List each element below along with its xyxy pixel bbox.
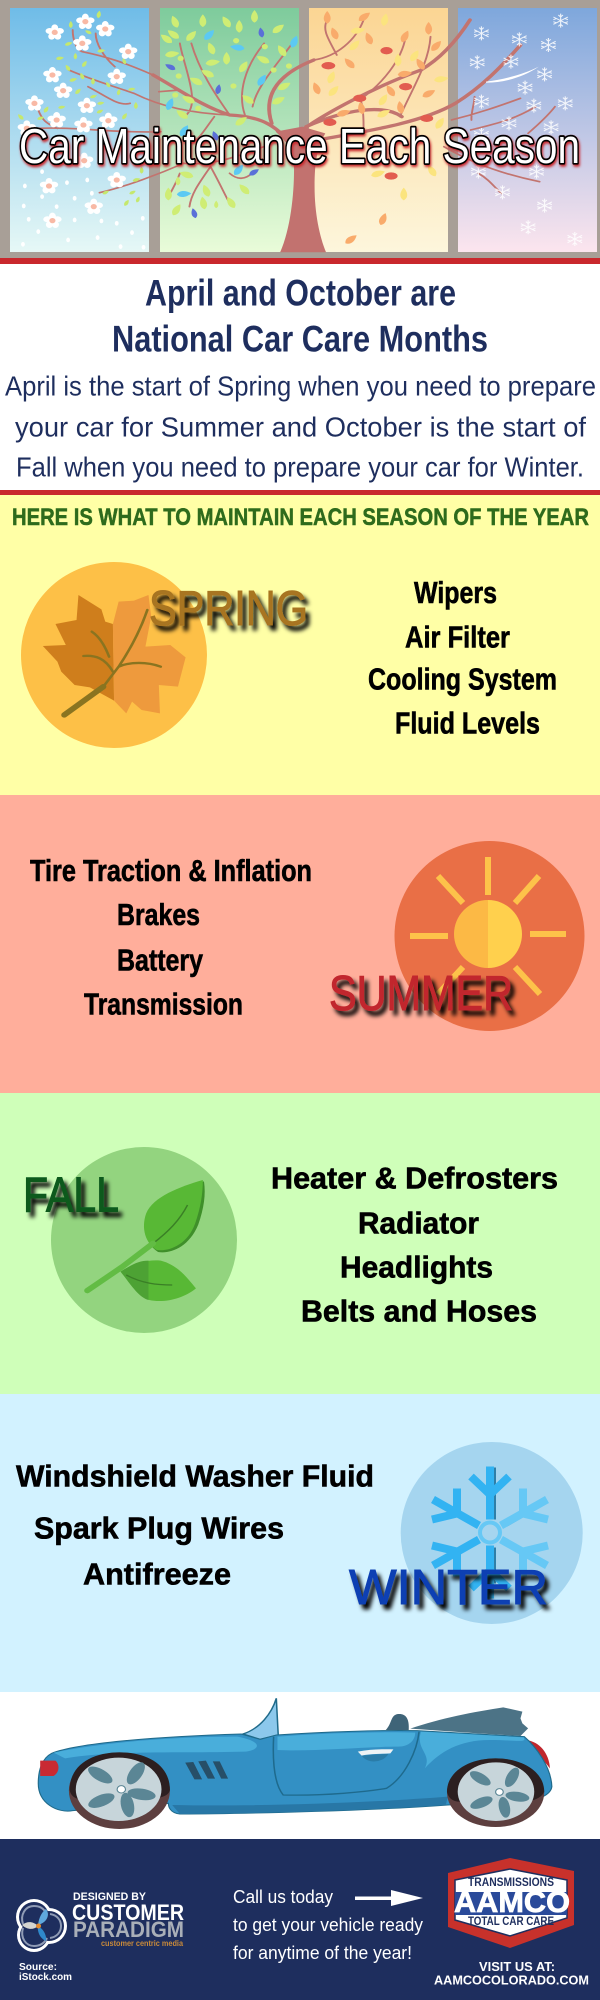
panel: winter <box>0 1394 600 1692</box>
spring checklist: Cooling System <box>368 662 557 696</box>
website: VISIT US AT: <box>479 1959 555 1974</box>
logo mark <box>16 1899 67 1952</box>
spring checklist: Fluid Levels <box>395 706 540 740</box>
call to action: to get your vehicle ready <box>233 1914 424 1935</box>
season window panels <box>10 8 597 252</box>
season label: spring: SPRING <box>149 582 308 636</box>
logo wordmark <box>72 1891 184 1948</box>
season label: summer: SUMMER <box>329 967 513 1021</box>
intro paragraph <box>5 370 596 482</box>
side vents <box>185 1761 228 1779</box>
logo: customer paradigm <box>16 1891 184 1952</box>
door outline <box>273 1732 419 1795</box>
tail light <box>526 1740 550 1768</box>
arrow <box>355 1890 423 1906</box>
summer checklist: Battery <box>117 942 204 978</box>
front wheel <box>69 1752 170 1829</box>
winter checklist: Spark Plug Wires <box>34 1510 284 1546</box>
winter checklist: Antifreeze <box>83 1556 231 1592</box>
spring checklist <box>368 575 557 740</box>
season label: fall: FALL <box>23 1168 119 1222</box>
logo: aamco <box>448 1858 574 1948</box>
intro paragraph: your car for Summer and October is the start of <box>15 412 586 442</box>
fall checklist: Radiator <box>358 1206 479 1240</box>
icon: green leaves in circle <box>51 1147 237 1333</box>
header banner <box>0 0 600 258</box>
icon: snowflake in circle <box>401 1442 583 1624</box>
headlight <box>40 1761 58 1776</box>
illustration: blue convertible car <box>38 1698 552 1829</box>
folded roof <box>410 1707 528 1736</box>
fall checklist: Belts and Hoses <box>301 1294 537 1328</box>
call to action: for anytime of the year! <box>233 1942 412 1963</box>
autumn leaves and fruit <box>311 10 449 246</box>
icon: sun in circle <box>394 841 584 1031</box>
spring checklist: Air Filter <box>405 620 510 654</box>
four season tree <box>17 10 582 252</box>
logo: aamco: AAMCO <box>454 1886 570 1919</box>
logo: aamco: TRANSMISSIONS <box>468 1875 554 1889</box>
fall checklist: Heater & Defrosters <box>271 1160 558 1196</box>
summer checklist: Brakes <box>117 897 200 932</box>
logo wordmark: DESIGNED BY <box>73 1891 147 1903</box>
window frame <box>0 0 600 258</box>
summer checklist: Tire Traction & Inflation <box>30 853 312 888</box>
winter checklist <box>16 1458 374 1592</box>
season label: winter: WINTER <box>349 1561 548 1615</box>
winter snowflakes <box>470 14 582 246</box>
footer <box>0 1839 600 2000</box>
logo wordmark: customer centric media <box>101 1939 184 1948</box>
panel: summer <box>0 795 600 1093</box>
logo wordmark: CUSTOMER <box>72 1900 184 1925</box>
door handle <box>358 1749 393 1756</box>
source credit: Source: <box>19 1961 57 1973</box>
intro heading: National Car Care Months <box>112 318 488 360</box>
summer leaves <box>159 10 300 219</box>
rear wheel <box>447 1758 544 1827</box>
seat headrest <box>386 1714 409 1730</box>
intro heading <box>112 272 488 360</box>
icon: autumn maple leaf in circle <box>21 562 207 748</box>
car body <box>38 1731 552 1814</box>
winter checklist: Windshield Washer Fluid <box>16 1458 374 1494</box>
tree trunk <box>276 127 326 252</box>
logo wordmark: PARADIGM <box>73 1917 184 1942</box>
spring checklist: Wipers <box>414 575 497 610</box>
call to action: Call us today <box>233 1886 334 1907</box>
spring leaves and blossoms <box>17 10 145 250</box>
website <box>434 1959 589 1988</box>
website: AAMCOCOLORADO.COM <box>434 1972 589 1988</box>
panel: spring <box>0 495 600 795</box>
windshield <box>243 1698 278 1739</box>
summer checklist <box>30 853 312 1022</box>
logo: aamco: TOTAL CAR CARE <box>468 1916 554 1928</box>
divider: red second band <box>0 490 600 495</box>
body highlights <box>54 1737 257 1758</box>
panel: fall <box>0 1093 600 1394</box>
divider: red top band <box>0 258 600 264</box>
source credit <box>19 1961 72 1983</box>
call to action <box>233 1886 424 1963</box>
fall checklist <box>271 1160 558 1328</box>
intro panel <box>0 264 600 490</box>
intro heading: April and October are <box>145 272 456 314</box>
source credit: iStock.com <box>19 1971 72 1983</box>
summer checklist: Transmission <box>84 986 243 1022</box>
fall checklist: Headlights <box>340 1250 493 1284</box>
